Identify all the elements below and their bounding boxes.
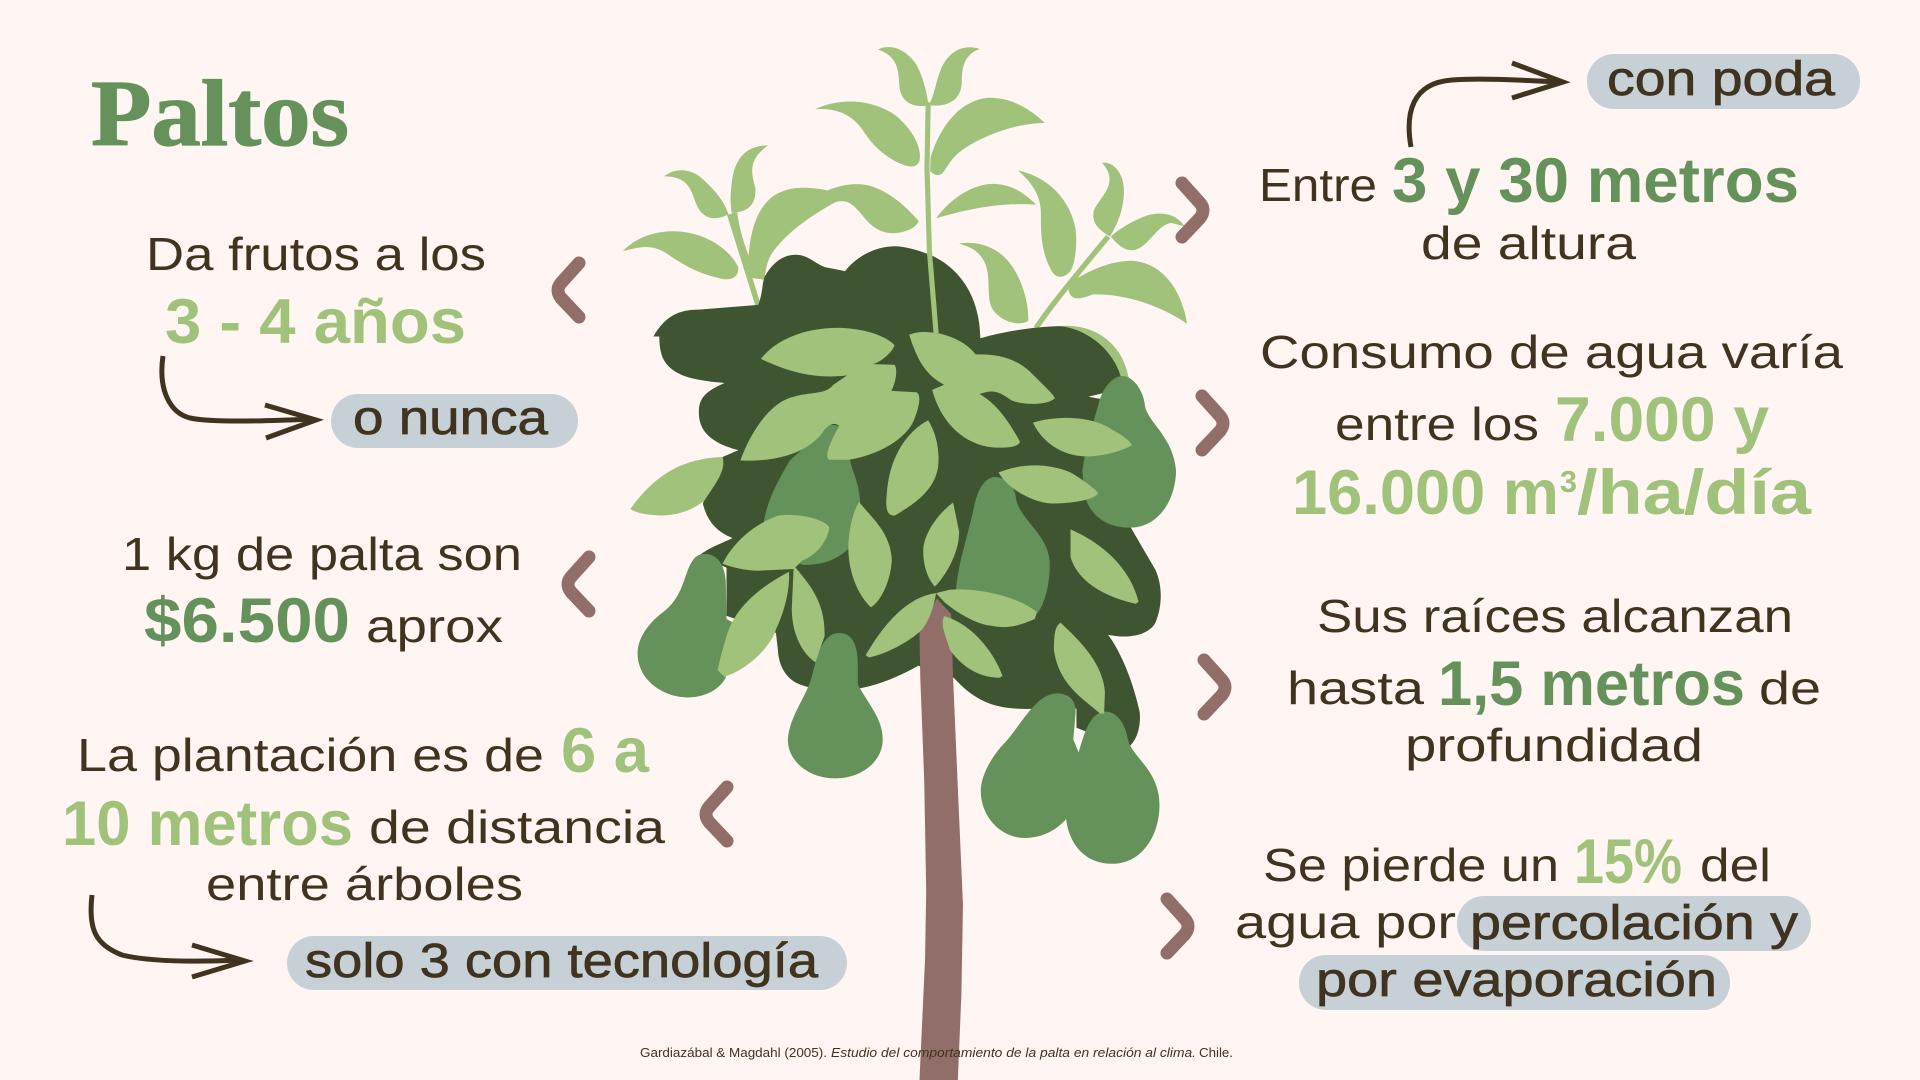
text block: water use: 7.000 y — [1555, 385, 1769, 455]
central stem — [927, 102, 936, 333]
avocado fruits — [638, 376, 1176, 864]
text block: price: 1 kg de palta son — [122, 528, 522, 580]
pill: solo 3 con tecnologia: solo 3 con tecnología — [305, 935, 818, 988]
text block: planting distance — [62, 716, 847, 990]
text block: roots: de — [1759, 662, 1821, 714]
arrow: distance to technology note — [91, 895, 245, 977]
text block: price: $6.500 — [144, 586, 350, 656]
illustration: avocado tree — [623, 47, 1187, 1080]
text block: height: 3 y 30 metros — [1392, 146, 1799, 216]
text block: water loss — [1235, 827, 1811, 1010]
text block: planting distance: 10 metros — [62, 789, 353, 859]
text block: height: de altura — [1421, 217, 1636, 269]
chevrons pointing at the tree — [558, 183, 1225, 953]
text block: planting distance: La plantación es de — [77, 729, 544, 781]
pill: o nunca — [331, 392, 578, 448]
text block: roots: 1,5 metros — [1438, 649, 1745, 719]
arrow: age to o nunca — [162, 356, 316, 438]
text block: fruit age: 3 - 4 años — [165, 287, 466, 357]
text block: water use: /ha/día — [1577, 458, 1812, 528]
text block: planting distance: de distancia — [369, 801, 666, 853]
source citation: Chile. — [1199, 1046, 1233, 1060]
source citation: Gardiazábal & Magdahl (2005). — [640, 1046, 827, 1060]
canopy — [653, 246, 1161, 748]
pill: por evaporacion: por evaporación — [1316, 954, 1717, 1007]
pill: con poda: con poda — [1607, 53, 1835, 106]
text block: roots: profundidad — [1405, 719, 1703, 771]
text block: roots: hasta — [1287, 662, 1425, 714]
text block: water loss: del — [1700, 839, 1771, 891]
text block: fruit age — [146, 228, 578, 448]
pill: o nunca: o nunca — [353, 392, 548, 445]
pill: percolacion y: percolación y — [1470, 897, 1798, 950]
source citation — [640, 1046, 1233, 1060]
text block: planting distance: 6 a — [561, 716, 650, 786]
canopy leaves — [630, 328, 1139, 714]
text block: water use: 16.000 m — [1292, 458, 1559, 528]
text block: roots: Sus raíces alcanzan — [1317, 590, 1793, 642]
pill: con poda — [1587, 53, 1860, 109]
text block: height: Entre — [1259, 159, 1377, 211]
text block: water loss: 15% — [1574, 827, 1682, 897]
trunk — [919, 599, 963, 1080]
title: Paltos — [91, 62, 349, 166]
upper branch leaves — [623, 47, 1187, 378]
text block: price: aprox — [366, 600, 503, 652]
text block: roots — [1287, 590, 1821, 771]
text block: height — [1259, 53, 1860, 269]
source citation: Estudio del comportamiento de la palta en relación al clima. — [831, 1046, 1196, 1060]
text block: water use: 3 — [1560, 464, 1577, 499]
text block: fruit age: Da frutos a los — [146, 228, 486, 280]
text block: water use: Consumo de agua varía — [1260, 326, 1843, 378]
text block: water use: entre los — [1335, 398, 1539, 450]
text block: water use — [1260, 326, 1843, 528]
text block: price — [122, 528, 522, 656]
text block: planting distance: entre árboles — [206, 858, 523, 910]
text block: water loss: agua por — [1235, 896, 1456, 948]
arrow: height to con poda — [1409, 63, 1563, 147]
text block: water loss: Se pierde un — [1263, 839, 1559, 891]
